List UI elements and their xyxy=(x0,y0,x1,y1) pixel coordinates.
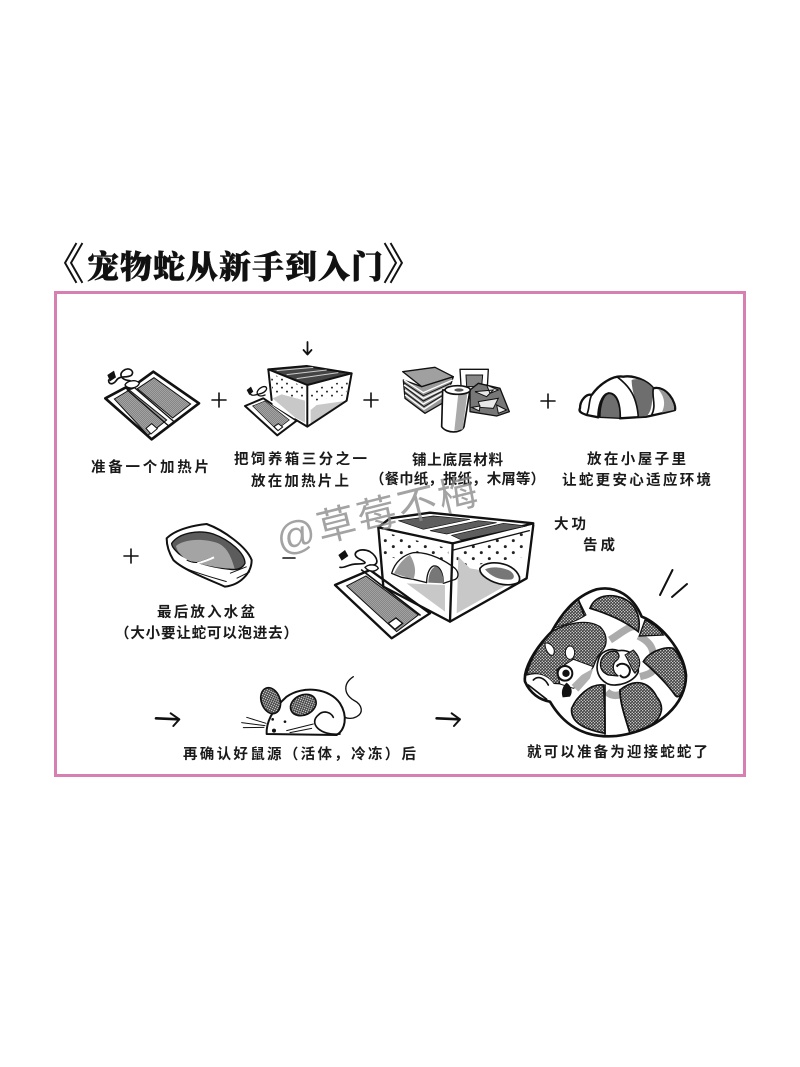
icon: excitement marks xyxy=(660,570,687,597)
caption: heat mat: 准备一个加热片 xyxy=(91,458,209,476)
title xyxy=(42,243,425,289)
caption: mouse: 再确认好鼠源（活体，冷冻）后 xyxy=(183,745,416,763)
panel: pink frame xyxy=(56,292,744,776)
caption: enclosure on mat: 放在加热片上 xyxy=(251,472,349,490)
caption: substrate: 铺上底层材料 xyxy=(412,451,504,469)
mini dish xyxy=(480,563,520,585)
icon: heat mat xyxy=(105,369,199,439)
caption: hide xyxy=(562,450,711,489)
plus sign xyxy=(364,393,378,407)
caption: ready: 就可以准备为迎接蛇蛇了 xyxy=(527,743,708,761)
caption: water dish: 最后放入水盆 xyxy=(157,603,256,621)
title: 《 xyxy=(42,243,84,289)
icon: substrate materials xyxy=(403,367,509,432)
caption: water dish: （大小要让蛇可以泡进去） xyxy=(115,624,298,642)
mini hide xyxy=(392,553,458,583)
plus sign xyxy=(212,393,226,407)
icon: down arrow xyxy=(304,342,312,354)
icon: enclosure on heat mat xyxy=(245,366,352,435)
caption: done: 告成 xyxy=(583,536,616,554)
icon: right arrow to snake xyxy=(437,713,460,726)
icon: finished enclosure xyxy=(335,513,533,638)
caption: substrate: （餐巾纸，报纸，木屑等） xyxy=(370,470,545,488)
plus sign xyxy=(541,394,555,408)
caption: hide: 让蛇更安心适应环境 xyxy=(562,471,711,489)
icon: water dish xyxy=(167,524,252,587)
caption: substrate xyxy=(370,451,545,488)
caption: enclosure on mat xyxy=(234,450,367,490)
caption: enclosure on mat: 把饲养箱三分之一 xyxy=(234,450,367,468)
caption: water dish xyxy=(115,603,298,642)
icon: snake xyxy=(525,588,686,736)
caption: done: 大功 xyxy=(554,516,586,533)
caption: hide: 放在小屋子里 xyxy=(587,450,686,468)
caption: done xyxy=(554,516,616,554)
plus sign xyxy=(124,549,138,563)
icon: left arrow to mouse xyxy=(156,713,179,726)
icon: mouse xyxy=(242,677,361,735)
watermark: @草莓不梅 xyxy=(272,470,482,562)
icon: hide house xyxy=(580,376,675,418)
equals sign xyxy=(283,557,295,559)
title: 宠物蛇从新手到入门 xyxy=(87,249,383,285)
title: 》 xyxy=(383,243,425,289)
